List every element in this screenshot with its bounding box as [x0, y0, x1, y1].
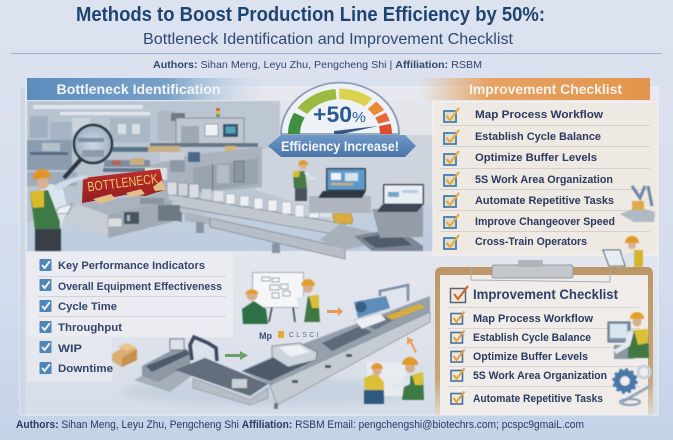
authors line: Authors: Sihan Meng, Leyu Zhu, Pengcheng Shi | Affiliation: RSBM — [153, 59, 482, 71]
panel: clipboard — [435, 260, 653, 415]
panel: clipboard: 5S Work Area Organization — [473, 370, 607, 382]
arrow: green — [225, 351, 248, 360]
panel: clipboard: Automate Repetitive Tasks — [473, 393, 603, 405]
banner: efficiency increase — [268, 135, 416, 157]
caption under whiteboard — [259, 331, 321, 341]
panel: improvement checklist: Automate Repetitive Tasks — [475, 195, 614, 207]
worker: inspector — [30, 169, 88, 251]
heading: improvement checklist — [420, 78, 650, 100]
panel: improvement checklist: Establish Cycle Balance — [475, 131, 601, 143]
panel: key performance indicators: Overall Equipment Effectiveness — [58, 281, 222, 293]
arrow: orange up — [407, 337, 417, 353]
banner: efficiency increase: Efficiency Increase! — [281, 138, 399, 154]
icon: magnifying glass — [64, 125, 112, 178]
icon: gears and wrench — [614, 366, 650, 405]
machine: upper right of lower line — [354, 285, 426, 329]
worker: operator — [293, 160, 316, 201]
conveyor line — [150, 182, 423, 259]
main conveyor — [241, 296, 430, 385]
heading: improvement checklist: Improvement Checklist — [469, 81, 622, 97]
machine under bottleneck sign — [62, 192, 180, 238]
sign: bottleneck: BOTTLENECK — [87, 171, 159, 194]
subtitle: Bottleneck Identification and Improvement Checklist — [143, 31, 514, 48]
heading: bottleneck identification — [27, 78, 262, 100]
sign: bottleneck — [82, 169, 166, 204]
laptop: right — [372, 184, 424, 238]
left conveyor — [175, 358, 268, 396]
workers at whiteboard — [242, 272, 320, 324]
laptop: left — [309, 168, 371, 213]
panel: clipboard: Optimize Buffer Levels — [473, 351, 588, 363]
panel: improvement checklist: Map Process Workflow — [475, 109, 603, 121]
panel: improvement checklist: Optimize Buffer Levels — [475, 152, 597, 164]
panel: factory scene — [27, 101, 433, 259]
panel: key performance indicators — [27, 252, 233, 382]
panel: clipboard: Establish Cycle Balance — [473, 332, 591, 344]
panel: key performance indicators: Cycle Time — [58, 301, 117, 313]
arrow: orange — [327, 307, 343, 316]
panel: key performance indicators: Key Performance Indicators — [58, 260, 205, 272]
panel: key performance indicators: Throughput — [58, 322, 122, 334]
worker with tablet — [603, 236, 644, 267]
lower production line — [120, 296, 430, 409]
left machine — [134, 358, 200, 392]
back machine — [103, 108, 262, 196]
clipboard heading: Improvement Checklist — [473, 286, 618, 302]
panel: improvement checklist — [433, 102, 658, 255]
worker at computer — [608, 312, 649, 359]
panel: key performance indicators: Downtime — [58, 363, 113, 375]
icon: stacked boxes — [112, 343, 137, 367]
clipboard clip — [471, 260, 610, 282]
box on conveyor — [272, 343, 317, 367]
panel: key performance indicators: WIP — [58, 343, 82, 355]
title: Methods to Boost Production Line Efficiency by 50%: — [76, 4, 545, 26]
robot arm — [190, 337, 217, 361]
gauge — [281, 83, 399, 134]
panel: improvement checklist: Improve Changeover Speed — [475, 216, 615, 228]
footer credits: Authors: Sihan Meng, Leyu Zhu, Pengcheng Shi Affiliation: RSBM Email: pengchengshi@biotechrs.com; pcspc9gmaiL.com — [16, 419, 584, 431]
main panel — [20, 87, 658, 415]
icon: robot arm and box — [620, 186, 655, 222]
panel: improvement checklist: 5S Work Area Organization — [475, 174, 613, 186]
workers with drawing — [364, 357, 424, 404]
gauge: +50% — [313, 102, 366, 127]
panel: improvement checklist: Cross-Train Operators — [475, 236, 587, 248]
caption under whiteboard: Mp — [259, 331, 272, 341]
heading: bottleneck identification: Bottleneck Identification — [56, 81, 220, 97]
caption under whiteboard: CLSCI — [289, 332, 321, 339]
panel: clipboard: Map Process Workflow — [473, 313, 593, 325]
